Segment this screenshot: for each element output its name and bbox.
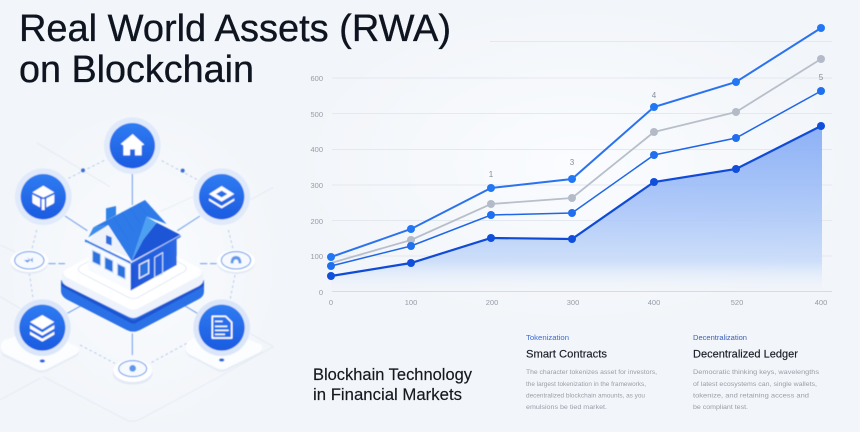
y axis labels [310,74,323,297]
title: on Blockchain [19,49,254,91]
subtitle [313,366,473,404]
ground plate outline [0,143,273,421]
text block: decentralized ledger [693,335,820,411]
text block: decentralized ledger: Democratic thinking keys, wavelengths [693,369,820,376]
connector dots [81,168,185,173]
right wall [131,238,177,291]
y axis labels: 100 [310,252,323,261]
white slab [62,233,203,318]
x axis labels: 200 [486,298,498,307]
icon: document [193,299,250,356]
plate: bottom right [185,329,262,372]
y axis labels: 0 [319,288,323,297]
subtitle: Blockhain Technology [313,366,473,384]
title [19,8,451,91]
point annotations: 3 [570,158,575,167]
y axis labels: 500 [310,110,323,119]
side gable roof [132,223,181,261]
x axis labels: 400 [815,298,827,307]
icon: stacked layers [14,299,71,356]
y axis labels: 400 [310,145,323,154]
dashed connector ring [29,160,235,363]
text block: smart contracts [526,335,657,411]
line chart [310,24,832,307]
chimney [106,206,116,221]
x axis labels: 520 [731,298,743,307]
gable window [106,235,112,246]
main roof [93,200,167,261]
front windows [92,250,101,266]
illustration: tokenized house network [0,117,273,421]
x axis labels: 400 [648,298,660,307]
title: Real World Assets (RWA) [19,8,451,50]
gable wall [89,226,128,257]
text block: decentralized ledger: of latest ecosystems can, single wallets, [693,381,817,388]
connector lines [48,174,217,355]
point annotations [489,73,824,179]
y axis labels: 600 [310,74,323,83]
x axis labels: 0 [329,298,333,307]
series 1 [327,24,825,261]
series 3 [327,87,825,270]
point annotations: 1 [489,170,494,179]
series 2 [331,55,825,263]
front eave [85,239,131,264]
door and side window [139,260,149,278]
small disc: left [10,250,48,274]
icon: cube [15,168,72,225]
text block: smart contracts: emulsions be tied market. [526,404,607,411]
point annotations: 5 [819,73,824,82]
series 4 [327,122,825,280]
x axis labels: 300 [567,298,579,307]
point annotations: 4 [652,91,657,100]
small disc: bottom [113,359,153,385]
text block: decentralized ledger: tokenize, and retaining access and [693,392,809,400]
text block: decentralized ledger: Decentralized Ledger [693,348,798,360]
text block: smart contracts: The character tokenizes asset for investors, [526,369,657,376]
text block: smart contracts: the largest tokenization in the frameworks, [526,381,646,388]
x axis labels [329,298,827,307]
y axis labels: 300 [310,181,323,190]
text block: smart contracts: Smart Contracts [526,348,608,360]
icon: home [104,117,161,174]
shaded area [331,126,822,291]
text block: smart contracts: decentralized blockchain amounts, as you [526,392,645,400]
icon: layered chip [193,168,250,225]
x axis labels: 100 [405,298,417,307]
text block: smart contracts: Tokenization [526,335,569,342]
gridlines [332,42,832,292]
blue base [61,280,204,332]
small disc: right [217,250,255,274]
left wall [88,242,131,291]
subtitle: in Financial Markets [313,386,462,404]
y axis labels: 200 [310,217,323,226]
text block: decentralized ledger: be compliant test. [693,404,748,411]
house [85,200,181,291]
plate: bottom left [1,329,79,373]
platform [61,233,204,332]
text block: decentralized ledger: Decentralization [693,335,747,342]
